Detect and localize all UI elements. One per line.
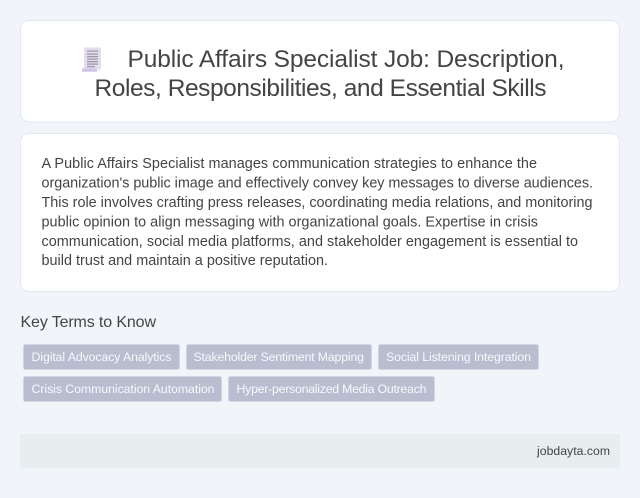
tag: Social Listening Integration (378, 344, 538, 370)
description text: organization's public image and effectively convey key messages to diverse audiences. (42, 176, 593, 192)
title (94, 46, 564, 102)
description text: build trust and maintain a positive reputation. (42, 253, 328, 269)
title: Public Affairs Specialist Job: Description, (128, 46, 564, 73)
tag: Stakeholder Sentiment Mapping: Stakeholder Sentiment Mapping (194, 350, 364, 364)
description text: This role involves crafting press releases, coordinating media relations, and monitoring (42, 195, 592, 211)
tag: Crisis Communication Automation (24, 376, 222, 402)
tag: Digital Advocacy Analytics: Digital Advocacy Analytics (32, 350, 172, 364)
tag: Social Listening Integration: Social Listening Integration (386, 350, 531, 364)
icon: document scroll (82, 48, 101, 72)
footer bar (20, 434, 620, 468)
tag: Stakeholder Sentiment Mapping (186, 344, 372, 370)
key terms heading: Key Terms to Know (20, 314, 156, 331)
footer source text: jobdayta.com (536, 444, 610, 458)
tag: Hyper-personalized Media Outreach (228, 376, 434, 402)
description panel (20, 134, 620, 292)
tag: Crisis Communication Automation: Crisis Communication Automation (32, 382, 215, 396)
title: Roles, Responsibilities, and Essential Skills (94, 75, 546, 102)
description text: public opinion to align messaging with organizational goals. Expertise in crisis (42, 214, 538, 230)
description text (42, 156, 593, 269)
tag: Digital Advocacy Analytics (24, 344, 180, 370)
tag: Hyper-personalized Media Outreach: Hyper-personalized Media Outreach (236, 382, 427, 396)
header panel (20, 20, 620, 122)
key terms tags (24, 344, 538, 402)
description text: A Public Affairs Specialist manages communication strategies to enhance the (42, 156, 537, 172)
description text: communication, social media platforms, and stakeholder engagement is essential to (42, 234, 578, 250)
